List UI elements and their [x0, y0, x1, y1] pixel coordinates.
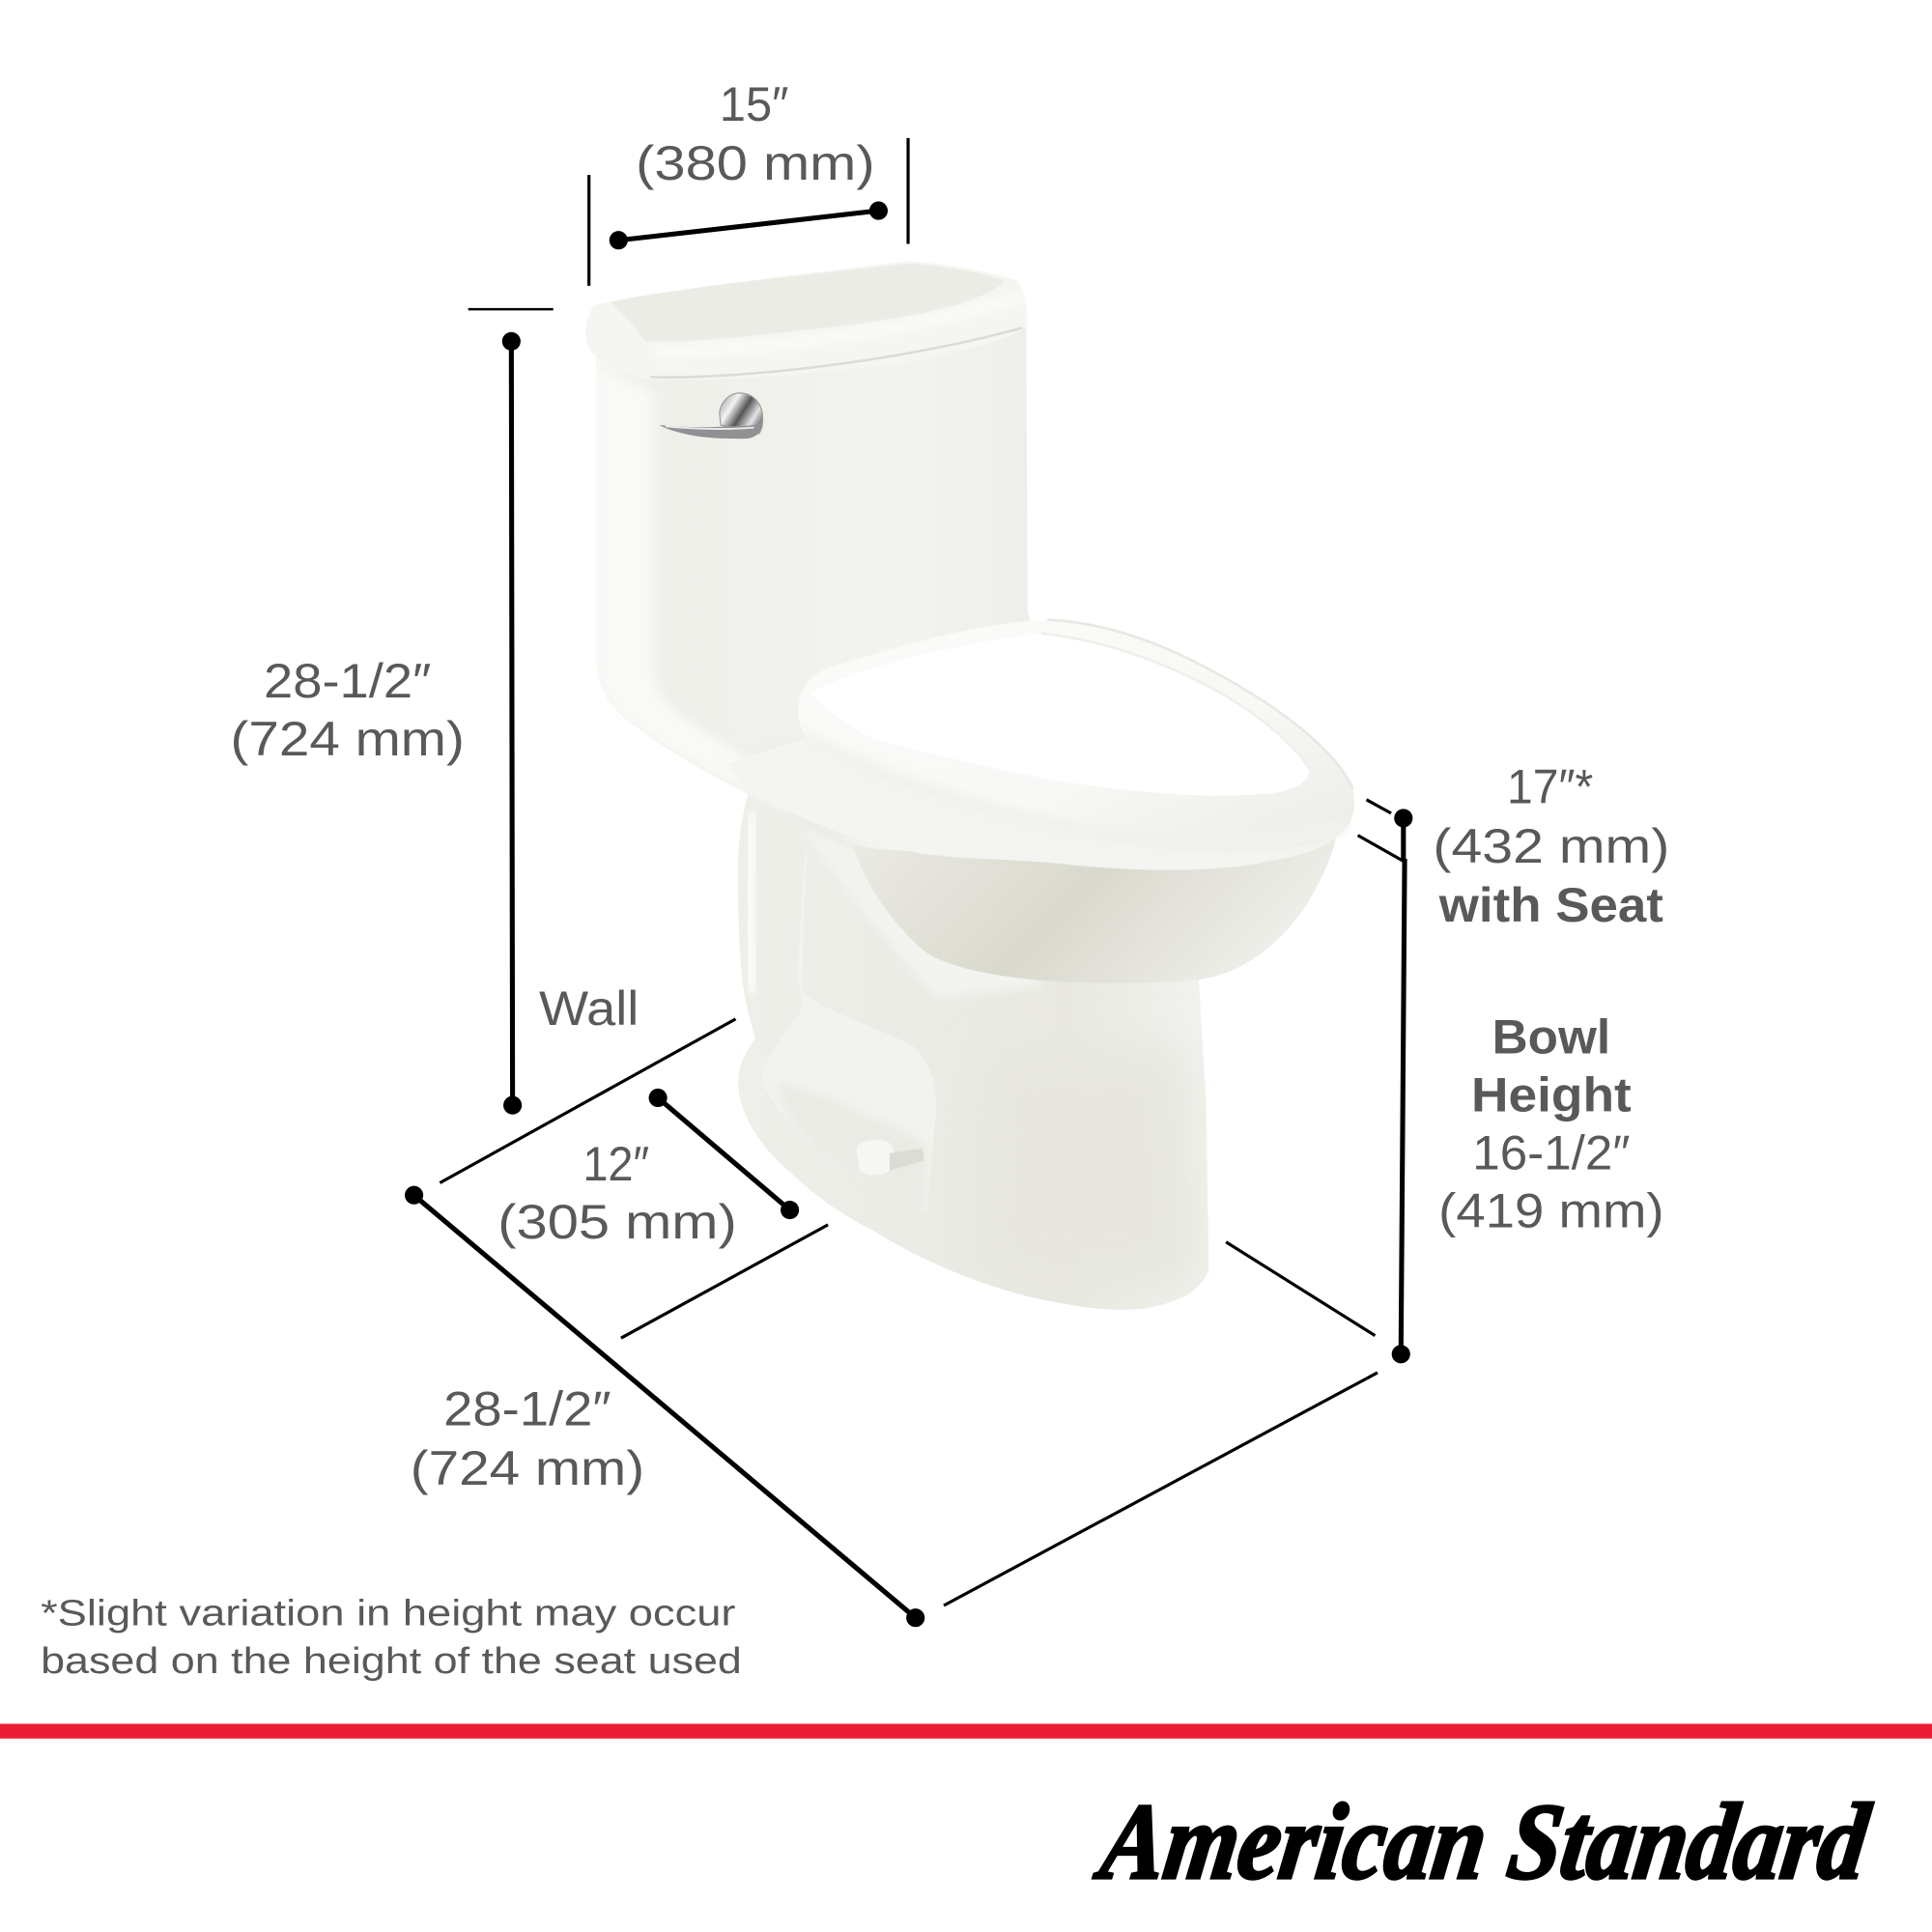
seat ticks — [1358, 800, 1406, 863]
red divider bar — [0, 1723, 1932, 1739]
dimension: tank width 15 in — [589, 77, 908, 286]
label: bowl height: Height — [1471, 1068, 1632, 1122]
label: (305 mm) — [497, 1195, 737, 1249]
label: 12″ — [582, 1137, 649, 1191]
label: bowl height: (419 mm) — [1438, 1183, 1664, 1237]
label: seat height — [1433, 760, 1669, 932]
top tick — [469, 308, 554, 310]
footnote — [41, 1592, 742, 1682]
toilet bowl — [849, 828, 1338, 983]
illustration: one-piece toilet — [585, 261, 1354, 1310]
toilet seat and lid — [799, 620, 1354, 852]
label: (380 mm) — [636, 136, 875, 190]
dimension: seat and bowl height — [1358, 760, 1669, 1363]
toilet tank — [597, 327, 1030, 850]
label: wall: Wall — [539, 981, 639, 1036]
label: 28-1/2″ — [264, 654, 431, 708]
label: (724 mm) — [411, 1441, 644, 1495]
measure line — [1392, 809, 1412, 1363]
tank lid — [585, 261, 1028, 381]
measure line — [649, 1089, 799, 1219]
bowl rim under seat — [727, 727, 1343, 870]
bolt cap — [856, 1140, 924, 1176]
footnote: *Slight variation in height may occur — [41, 1592, 736, 1634]
measure line — [502, 332, 522, 1115]
label: (724 mm) — [231, 712, 465, 766]
label: bowl height — [1438, 1010, 1664, 1237]
label: seat height: 17″* — [1507, 760, 1593, 814]
toilet base and pedestal — [738, 777, 1208, 1310]
flush handle — [659, 393, 763, 439]
label: seat height: (432 mm) — [1433, 819, 1669, 873]
measure line — [610, 202, 888, 249]
label: bowl height: 16-1/2″ — [1472, 1125, 1630, 1179]
dimension: overall depth 28-1/2 in — [405, 1186, 924, 1627]
label: bowl height: Bowl — [1492, 1010, 1610, 1065]
label — [636, 77, 875, 190]
floor guide lines — [944, 1242, 1378, 1605]
footnote: based on the height of the seat used — [41, 1640, 742, 1682]
label: 28-1/2″ — [443, 1382, 611, 1436]
dimension: overall height 28-1/2 in — [231, 309, 554, 1115]
label — [497, 1137, 737, 1249]
wall extension lines — [440, 1019, 828, 1338]
label — [411, 1382, 644, 1495]
dimension: rough-in 12 in — [440, 1019, 828, 1338]
measure line — [405, 1186, 924, 1627]
label: 15″ — [720, 77, 788, 131]
label — [231, 654, 465, 766]
label: seat height: with Seat — [1438, 878, 1663, 932]
extension lines — [589, 138, 908, 286]
